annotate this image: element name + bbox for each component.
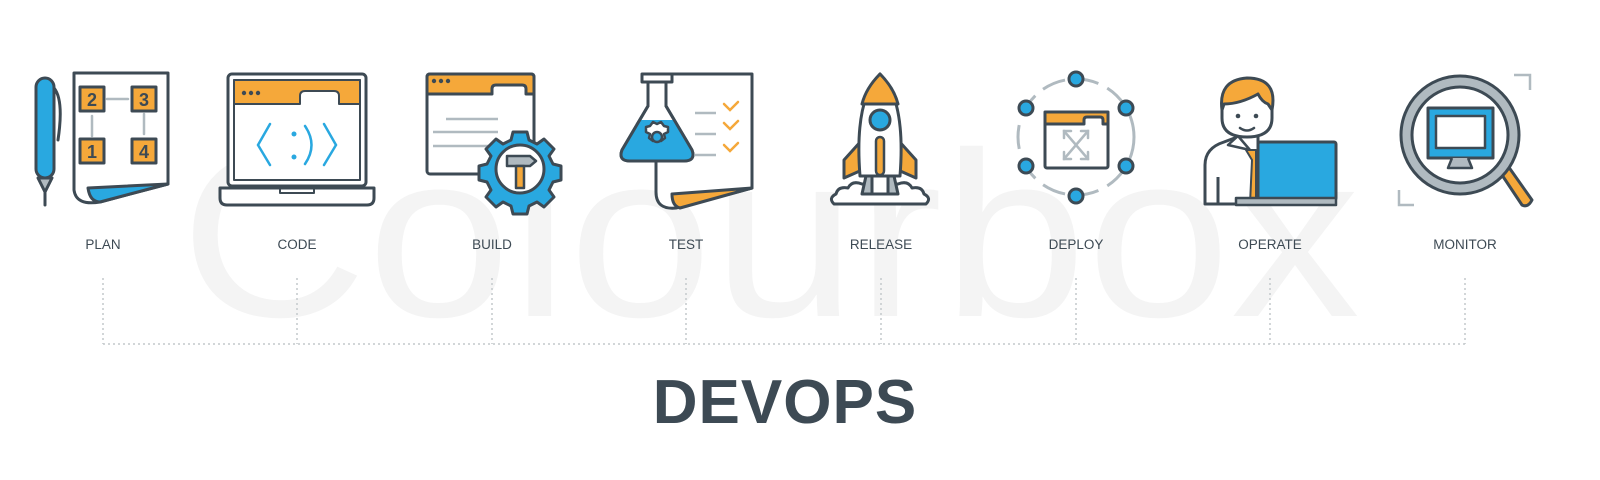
icon: release: [831, 74, 929, 204]
icon: deploy: [1018, 72, 1134, 203]
stage labels: [85, 237, 1497, 252]
stage labels: OPERATE: [1238, 237, 1302, 252]
text: 2: [87, 90, 97, 110]
text: 1: [87, 142, 97, 162]
stage labels: PLAN: [85, 237, 121, 252]
stage labels: MONITOR: [1433, 237, 1497, 252]
stage labels: TEST: [669, 237, 703, 252]
stage labels: CODE: [277, 237, 317, 252]
stage labels: DEPLOY: [1049, 237, 1103, 252]
title: DEVOPS: [653, 368, 917, 437]
text: 4: [139, 142, 149, 162]
icon: monitor: [1401, 76, 1532, 206]
text: 3: [139, 90, 149, 110]
icon: test: [621, 74, 752, 208]
stage labels: RELEASE: [850, 237, 912, 252]
icon: plan: [36, 73, 168, 205]
connector lines: [103, 278, 1465, 344]
icon: operate: [1205, 78, 1336, 205]
watermark: Colourbox: [180, 103, 1360, 366]
stage labels: BUILD: [472, 237, 512, 252]
icon: build: [427, 74, 561, 214]
icon: code: [220, 74, 374, 205]
